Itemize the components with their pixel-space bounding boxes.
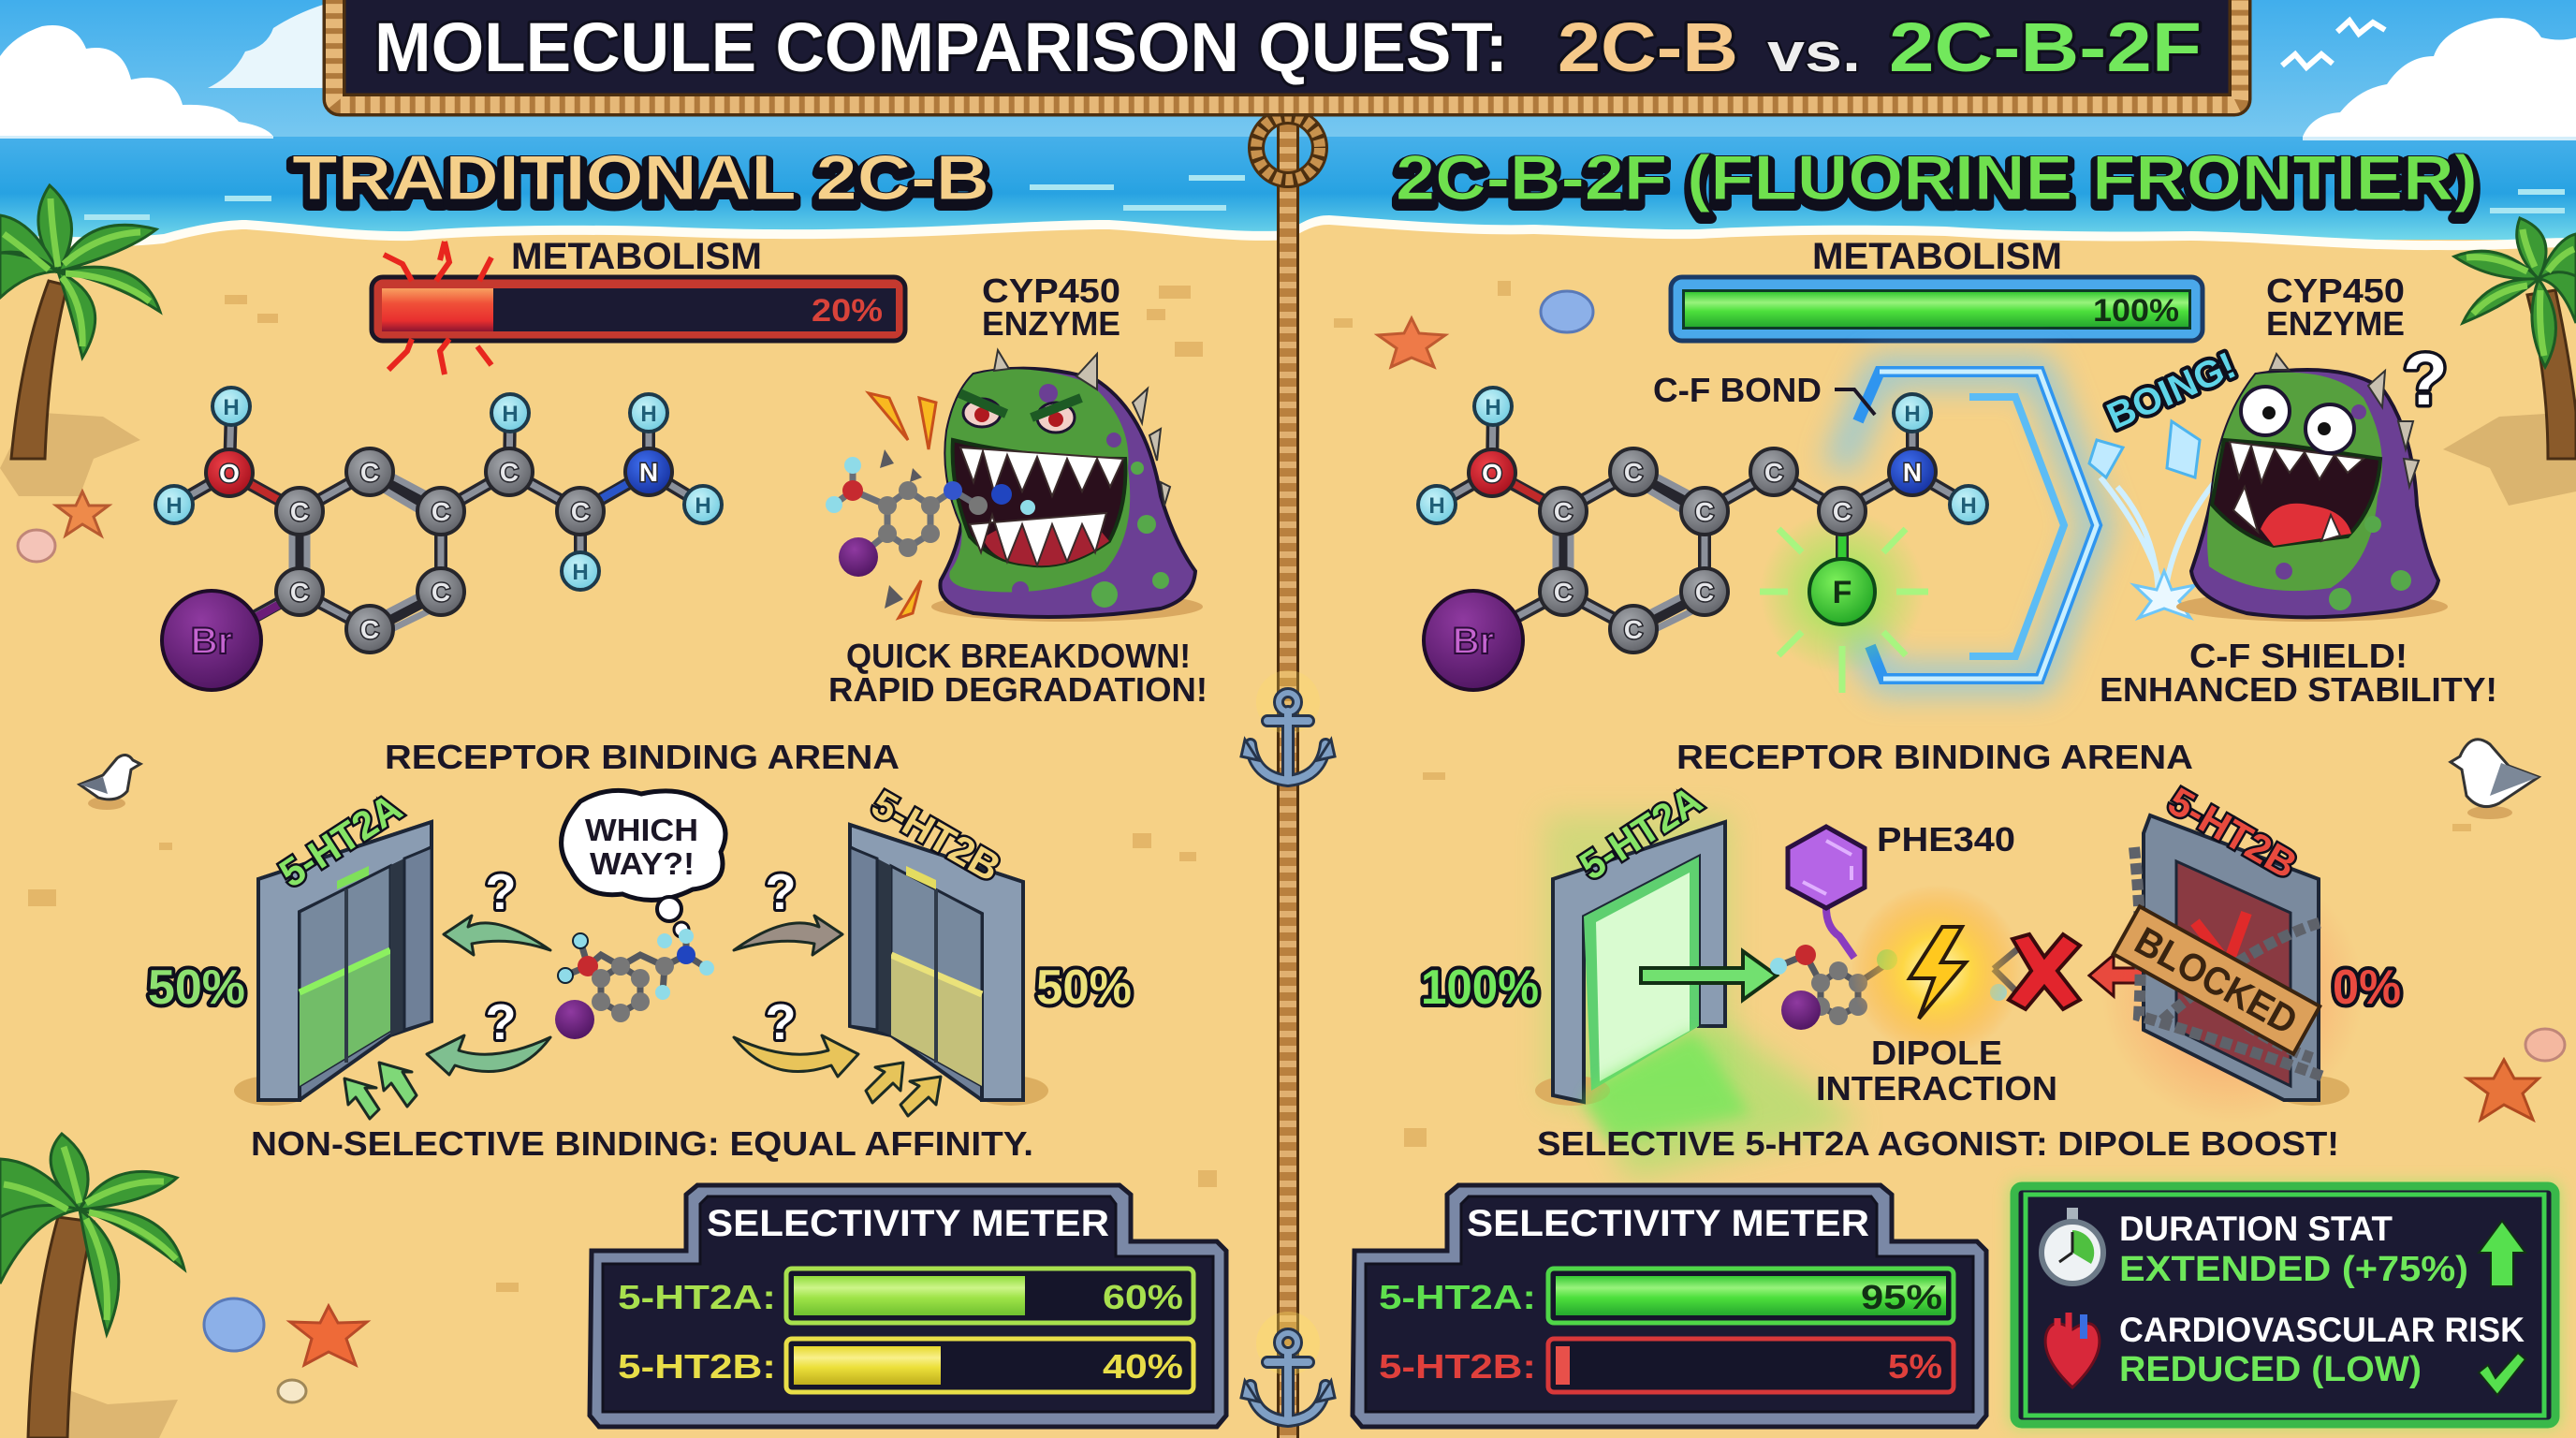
panel: right receptor arena	[1421, 777, 2401, 1180]
enzyme label right: CYP450	[2266, 271, 2405, 310]
confused question mark: ?	[2403, 338, 2448, 420]
title panel: 2C-B-2F	[1889, 8, 2202, 86]
caption selective: SELECTIVE 5-HT2A AGONIST: DIPOLE BOOST!	[1537, 1124, 2339, 1163]
PHE340 residue: PHE340	[1877, 820, 2015, 858]
C-F bond callout: C-F BOND	[1653, 371, 1822, 409]
affinity 0%: 0%	[2333, 961, 2401, 1015]
enzyme label left	[982, 271, 1120, 343]
carbon atoms: C	[571, 497, 590, 526]
hydrogen atoms	[155, 388, 722, 590]
carbon atoms: C	[360, 458, 379, 487]
bromine atom	[1424, 591, 1523, 690]
anchor upper	[1241, 670, 1335, 781]
curved arrows	[344, 916, 941, 1119]
carbon atoms: C	[290, 578, 309, 607]
C-F bond callout	[1653, 371, 1875, 415]
metabolism label: METABOLISM	[511, 236, 762, 277]
5-HT2A row 95%: 95%	[1861, 1278, 1942, 1316]
heading: receptor arena right: RECEPTOR BINDING ARENA	[1676, 738, 2193, 776]
molecule: traditional 2C-B	[155, 388, 722, 690]
affinity 50% right: 50%	[1036, 961, 1132, 1015]
oxygen atom: O	[219, 459, 240, 488]
carbon atoms: C	[1624, 615, 1643, 644]
metabolism bar 100%: 100%	[2093, 293, 2179, 329]
enzyme label right: ENZYME	[2266, 304, 2405, 343]
palm tree top left	[0, 185, 160, 496]
title panel: 2C-B	[1558, 8, 1738, 86]
hydrogen atoms: H	[1960, 493, 1977, 519]
meter title: SELECTIVITY METER	[1467, 1203, 1869, 1244]
carbon atoms: C	[1764, 458, 1783, 487]
elevator 5-HT2B blocked: BLOCKED	[2128, 918, 2305, 1043]
panel: stat summary	[2009, 1181, 2561, 1429]
metabolism bar 20%: 20%	[812, 293, 883, 329]
carbon atoms	[276, 448, 604, 653]
elevator 5-HT2B 50%	[850, 782, 1048, 1106]
PHE340 residue	[1788, 820, 2015, 958]
elevator 5-HT2A 50%: 5-HT2A	[271, 785, 409, 896]
splash burst	[2089, 421, 2218, 618]
enzyme label right	[2266, 271, 2405, 343]
hydrogen atoms: H	[695, 493, 711, 519]
hydrogen atoms: H	[1904, 402, 1921, 427]
meter title: SELECTIVITY METER	[707, 1203, 1109, 1244]
anchor lower	[1241, 1312, 1335, 1421]
dipole label: DIPOLE	[1871, 1034, 2002, 1072]
metabolism bar 20%	[372, 277, 905, 341]
carbon atoms	[1540, 448, 1866, 653]
hydrogen atoms: H	[640, 402, 657, 427]
question marks: ?	[766, 864, 796, 920]
mini molecule undecided	[555, 929, 714, 1039]
metabolism bar 100%	[1671, 277, 2203, 341]
5-HT2B row 5%: 5-HT2B:	[1379, 1347, 1536, 1386]
clouds left	[0, 5, 323, 139]
oxygen atom: O	[1482, 459, 1502, 488]
oxygen atom	[206, 449, 253, 496]
elevator 5-HT2A 50%	[234, 785, 432, 1106]
metabolism label: METABOLISM	[1812, 236, 2062, 277]
hydrogen atoms: H	[1428, 493, 1445, 519]
clouds right	[2303, 18, 2576, 140]
caption: quick breakdown	[828, 637, 1208, 709]
duration extended value: EXTENDED (+75%)	[2119, 1250, 2468, 1289]
question marks: ?	[485, 994, 517, 1050]
nitrogen atom	[625, 448, 672, 495]
bromine atom: Br	[1453, 621, 1494, 662]
red arrow	[2089, 955, 2148, 996]
elevator 5-HT2B 50%: 5-HT2B	[865, 782, 1008, 889]
palm tree right	[2443, 218, 2576, 506]
icon: heart	[2045, 1313, 2100, 1387]
bromine atom	[162, 591, 261, 690]
heading: 2C-B-2F fluorine frontier: 2C-B-2F (FLUORINE FRONTIER)	[1396, 148, 2478, 219]
5-HT2A row 95%: 5-HT2A:	[1379, 1278, 1536, 1316]
enzyme label left: ENZYME	[982, 304, 1120, 343]
5-HT2B row 5%	[1379, 1339, 1954, 1392]
5-HT2B row 40%	[618, 1339, 1193, 1392]
hydrogen atoms: H	[1485, 395, 1501, 420]
elevator 5-HT2B blocked: 5-HT2B	[2161, 779, 2305, 887]
carbon atoms: C	[1695, 578, 1714, 607]
carbon atoms: C	[432, 578, 450, 607]
hydrogen atoms	[1418, 388, 1987, 523]
heading: traditional 2C-B: TRADITIONAL 2C-B	[292, 148, 989, 219]
question marks: ?	[485, 864, 517, 920]
5-HT2B row 40%: 40%	[1103, 1347, 1183, 1386]
carbon atoms: C	[432, 497, 450, 526]
palm tree bottom left	[0, 1134, 184, 1438]
bonds	[1437, 406, 1969, 640]
5-HT2B row 5%: 5%	[1888, 1347, 1942, 1386]
molecule: 2C-B-2F	[1418, 388, 1987, 693]
carbon atoms: C	[290, 497, 309, 526]
caption: quick breakdown: RAPID DEGRADATION!	[828, 670, 1208, 709]
caption: quick breakdown: QUICK BREAKDOWN!	[846, 637, 1191, 675]
bonds	[174, 406, 703, 640]
5-HT2A row 60%	[618, 1269, 1193, 1323]
speech bubble: WAY?!	[590, 846, 695, 881]
elevator 5-HT2B blocked	[2101, 779, 2364, 1123]
icon: up arrow	[2479, 1221, 2525, 1286]
hydrogen atoms: H	[572, 560, 589, 585]
BOING label: BOING!	[2101, 345, 2242, 437]
red damage sparks	[384, 242, 491, 374]
speech bubble	[562, 790, 725, 937]
caption: C-F shield: ENHANCED STABILITY!	[2100, 670, 2497, 709]
carbon atoms: C	[1554, 578, 1573, 607]
heading: 2C-B-2F fluorine frontier: 2C-B-2F (FLUORINE FRONTIER)	[1396, 142, 2478, 213]
caption: C-F shield	[2100, 637, 2497, 709]
mini molecule bound	[1770, 945, 2022, 1030]
red cross	[2009, 934, 2080, 1009]
speech bubble: WHICH	[585, 813, 698, 847]
energy shield	[1838, 372, 2097, 679]
seagull right	[2451, 740, 2539, 819]
caption: C-F shield: C-F SHIELD!	[2189, 637, 2408, 675]
title panel	[334, 0, 2240, 105]
caption non-selective: NON-SELECTIVE BINDING: EQUAL AFFINITY.	[251, 1124, 1033, 1163]
question marks	[485, 864, 796, 1050]
green arrow	[1641, 951, 1777, 1000]
nitrogen atom: N	[639, 458, 658, 487]
fluorine glow	[1760, 496, 1928, 693]
panel: selectivity meter right	[1353, 1185, 1986, 1427]
icon: check mark	[2479, 1353, 2525, 1395]
panel: selectivity meter left	[590, 1185, 1226, 1427]
mini molecule being eaten	[826, 457, 1035, 577]
icon: angry CYP450 monster eating molecule	[826, 350, 1203, 622]
hydrogen atoms: H	[223, 395, 240, 420]
fluorine atom: F	[1833, 575, 1852, 610]
affinity 50% left: 50%	[148, 961, 245, 1015]
hydrogen atoms: H	[502, 402, 519, 427]
5-HT2A row 60%: 5-HT2A:	[618, 1278, 776, 1316]
flying seagulls	[2282, 21, 2385, 67]
bromine atom: Br	[191, 621, 232, 662]
carbon atoms: C	[1695, 497, 1714, 526]
affinity 100%: 100%	[1421, 961, 1539, 1015]
enzyme label left: CYP450	[982, 271, 1120, 310]
center rope divider	[1256, 116, 1320, 1438]
carbon atoms: C	[1624, 458, 1643, 487]
carbon atoms: C	[500, 458, 519, 487]
hydrogen atoms: H	[166, 493, 183, 519]
fluorine atom	[1809, 559, 1875, 624]
title panel: vs.	[1767, 22, 1861, 83]
panel: left receptor arena	[148, 782, 1132, 1163]
5-HT2A row 60%: 60%	[1103, 1278, 1183, 1316]
5-HT2A row 95%	[1379, 1269, 1954, 1323]
elevator 5-HT2A open: 5-HT2A	[1572, 777, 1709, 888]
icon: surprised CYP450 monster	[2176, 354, 2448, 622]
question marks: ?	[766, 994, 796, 1050]
lightning dipole	[1851, 885, 2023, 1057]
cardiovascular reduced value: REDUCED (LOW)	[2119, 1350, 2422, 1389]
nitrogen atom: N	[1903, 458, 1922, 487]
5-HT2B row 40%: 5-HT2B:	[618, 1347, 776, 1386]
nitrogen atom	[1889, 448, 1936, 495]
oxygen atom	[1469, 449, 1515, 496]
carbon atoms: C	[1554, 497, 1573, 526]
seagull left	[80, 755, 140, 810]
icon: stopwatch	[2042, 1208, 2103, 1284]
elevator 5-HT2A open	[1535, 777, 1863, 1180]
title panel: MOLECULE COMPARISON QUEST:	[374, 8, 1508, 86]
cardiovascular risk label: CARDIOVASCULAR RISK	[2119, 1311, 2525, 1349]
heading: traditional 2C-B: TRADITIONAL 2C-B	[292, 142, 989, 213]
carbon atoms: C	[360, 615, 379, 644]
carbon atoms: C	[1833, 497, 1852, 526]
dipole label: INTERACTION	[1816, 1069, 2057, 1108]
panel: left metabolism	[372, 236, 905, 374]
heading: receptor arena left: RECEPTOR BINDING ARENA	[385, 738, 900, 776]
duration stat label: DURATION STAT	[2119, 1210, 2393, 1248]
beach decorations: starfish and shells	[18, 281, 2565, 1402]
panel: right metabolism	[1671, 236, 2203, 341]
dipole label	[1816, 1034, 2057, 1108]
